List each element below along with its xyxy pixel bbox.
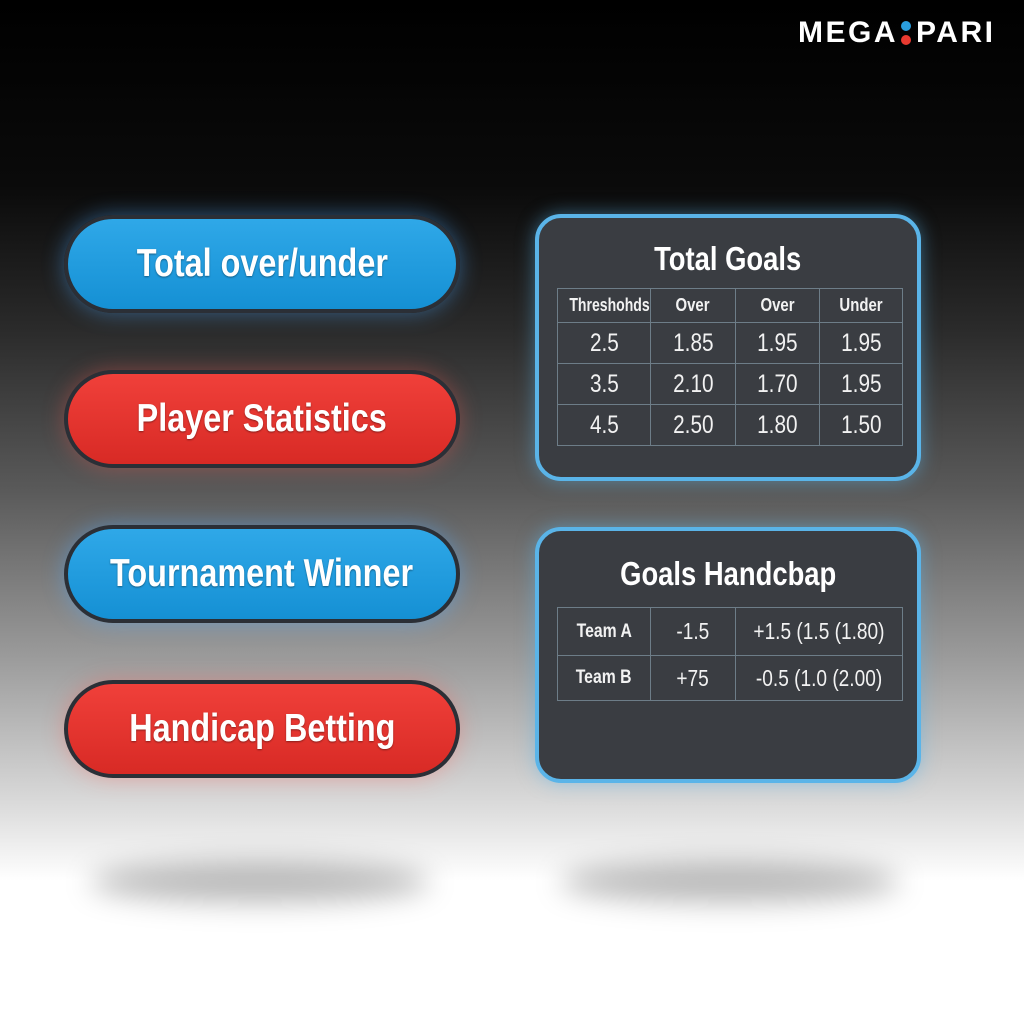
- table: total goals: 1.85: [673, 328, 713, 356]
- panel: Total Goals: [535, 214, 921, 481]
- table: total goals: Under: [839, 295, 883, 315]
- table: handicap: [557, 607, 903, 701]
- table: total goals: 1.50: [841, 410, 881, 438]
- pill: Total over/under: Total over/under: [136, 242, 388, 285]
- pill: Tournament Winner: [64, 525, 460, 623]
- table: handicap: +1.5 (1.5 (1.80): [753, 618, 885, 644]
- heading: Total Goals: Total Goals: [654, 240, 802, 277]
- table: total goals: 1.95: [841, 370, 881, 398]
- table: handicap: +75: [677, 664, 709, 690]
- logo: MEGA PARI: [798, 16, 995, 49]
- pill: Tournament Winner: Tournament Winner: [110, 552, 414, 595]
- table: handicap: -1.5: [677, 618, 709, 644]
- pill: Handicap Betting: [64, 680, 460, 778]
- table: total goals: Over: [676, 295, 710, 315]
- pill: Player Statistics: [64, 370, 460, 468]
- table: total goals: 1.70: [757, 370, 798, 398]
- table: handicap: Team A: [576, 620, 632, 642]
- pill: Total over/under: [64, 215, 460, 313]
- table: total goals: 2.50: [673, 410, 713, 438]
- table: total goals: Over: [760, 295, 795, 315]
- table: total goals: 2.10: [673, 370, 713, 398]
- table: total goals: 2.5: [590, 328, 618, 356]
- table: total goals: 1.95: [841, 328, 881, 356]
- pill: Player Statistics: Player Statistics: [137, 397, 387, 440]
- panel: Goals Handicap: [535, 527, 921, 783]
- table: total goals: Threshohds: [569, 295, 650, 315]
- table: total goals: [557, 288, 903, 446]
- table: total goals: 1.80: [757, 410, 798, 438]
- table: total goals: 4.5: [590, 410, 618, 438]
- table: handicap: Team B: [576, 667, 632, 688]
- table: total goals: 3.5: [590, 370, 618, 398]
- table: total goals: 1.95: [757, 328, 798, 356]
- table: handicap: -0.5 (1.0 (2.00): [756, 664, 882, 690]
- heading: Goals Handcbap: Goals Handcbap: [620, 555, 836, 592]
- pill: Handicap Betting: Handicap Betting: [129, 707, 395, 750]
